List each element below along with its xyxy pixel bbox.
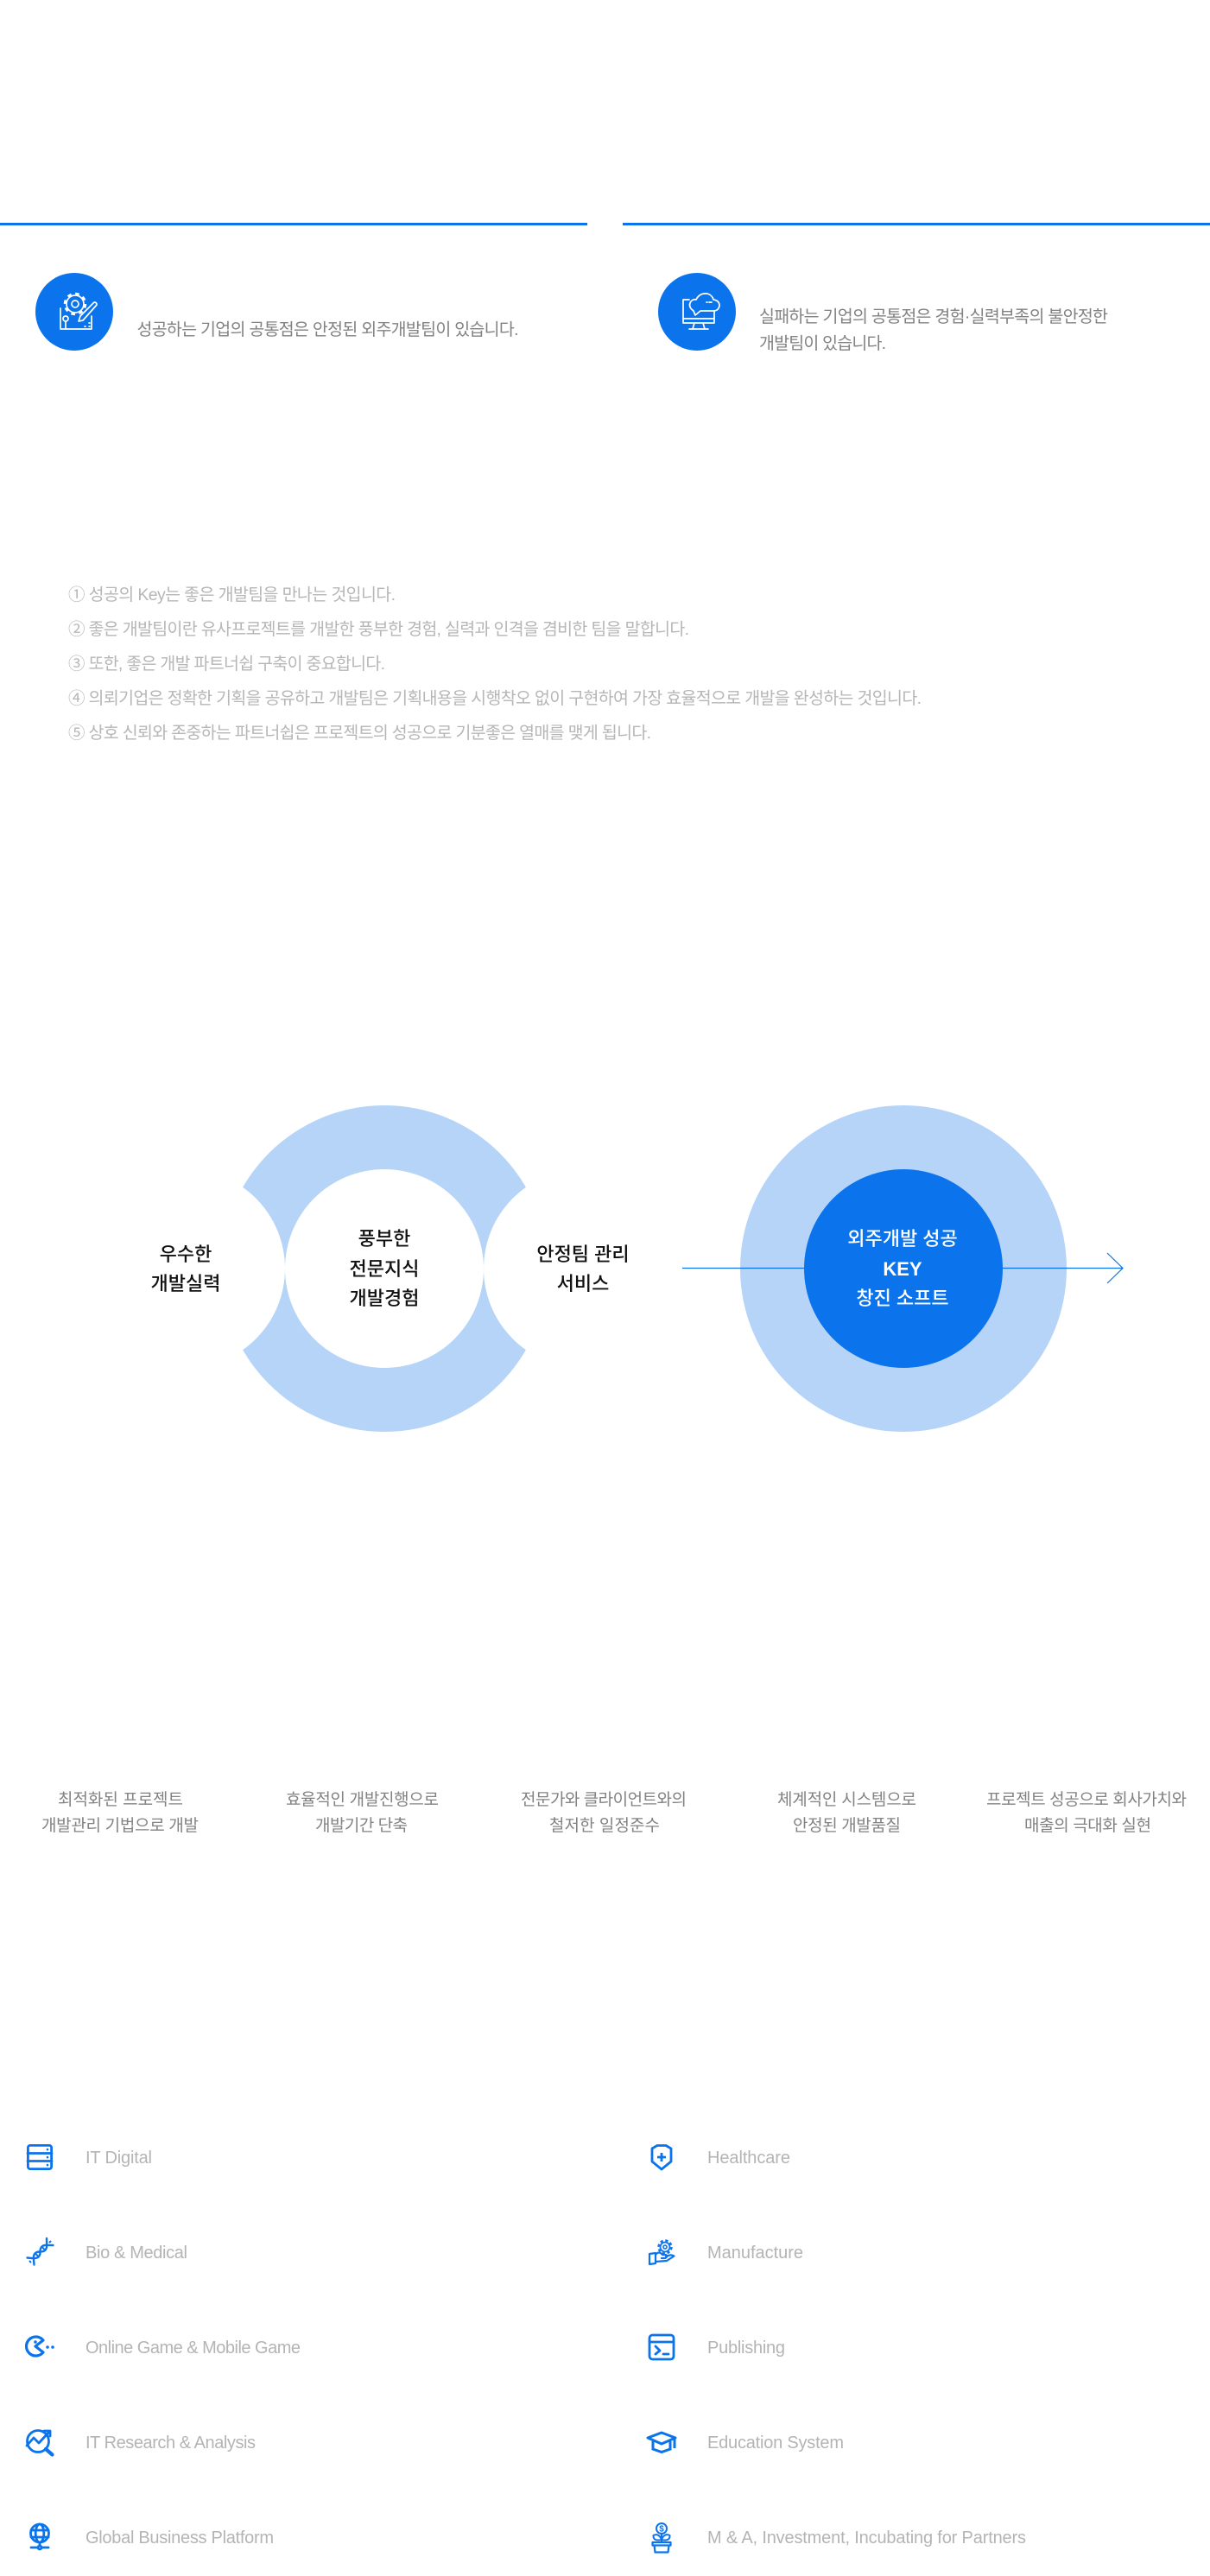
text: benefit 2 [286, 1790, 439, 1835]
row: Global Business: Global Business Platform [86, 2529, 274, 2548]
icon: money plant [653, 2523, 670, 2553]
text: benefit 5: 프로젝트 성공으로 회사가치와 [986, 1790, 1187, 1809]
label: success key [847, 1228, 958, 1309]
diagram: success key circle with arrow [682, 1105, 1123, 1432]
label: center circle: 풍부한 [358, 1228, 410, 1250]
row: Publishing [649, 2335, 785, 2359]
label: center circle [350, 1228, 419, 1309]
icon: hand with gear [649, 2240, 674, 2264]
icon: server [28, 2145, 52, 2169]
row: Online Game: Online Game & Mobile Game [86, 2339, 301, 2358]
icon: gear and pencil [35, 273, 113, 351]
row: Manufacture [649, 2240, 803, 2264]
text: benefit 1: 최적화된 프로젝트 [58, 1790, 183, 1809]
row: Bio & Medical [28, 2238, 187, 2264]
label: right circle: 안정팀 관리 [536, 1244, 630, 1265]
text: benefit 4: 안정된 개발품질 [793, 1816, 901, 1835]
text block: key points list: ① 성공의 Key는 좋은 개발팀을 만나는 것입니다. [68, 585, 396, 604]
diagram: three circle overlap [86, 1105, 682, 1432]
row: Education: Education System [707, 2434, 844, 2453]
row: IT Digital: IT Digital [86, 2149, 152, 2168]
row: IT Research [27, 2430, 256, 2454]
text: failure description [759, 307, 1108, 353]
label: right circle [536, 1244, 630, 1294]
text: benefit 4: 체계적인 시스템으로 [777, 1790, 916, 1809]
label: left circle: 우수한 [160, 1244, 212, 1265]
text: failure description: 실패하는 기업의 공통점은 경험·실력부족의 불안정한 [759, 307, 1108, 326]
icon: magnifier chart [27, 2430, 52, 2454]
icon: globe [31, 2524, 48, 2549]
text: benefit 2: 효율적인 개발진행으로 [286, 1790, 439, 1809]
row: Global Business [31, 2524, 274, 2549]
row: Education [648, 2433, 844, 2453]
text: benefit 3 [521, 1790, 687, 1835]
label: center circle: 개발경험 [350, 1288, 419, 1309]
icon: terminal window [649, 2335, 674, 2359]
row: Publishing: Publishing [707, 2339, 785, 2358]
label: success key: KEY [883, 1258, 922, 1280]
text block: key points list [68, 585, 922, 743]
row: M & A: M & A, Investment, Incubating for Partners [707, 2529, 1026, 2548]
icon: shield [652, 2145, 671, 2169]
text block: key points list: ② 좋은 개발팀이란 유사프로젝트를 개발한 풍부한 경험, 실력과 인격을 겸비한 팀을 말합니다. [68, 620, 689, 639]
panel: success companies [0, 223, 587, 351]
text: benefit 2: 개발기간 단축 [315, 1816, 408, 1835]
row: Bio & Medical: Bio & Medical [86, 2244, 187, 2263]
label: left circle [151, 1244, 220, 1294]
text: benefit 3: 전문가와 클라이언트와의 [521, 1790, 687, 1809]
text: benefit 3: 철저한 일정준수 [549, 1816, 660, 1835]
label: success key: 창진 소프트 [856, 1288, 949, 1309]
label: right circle: 서비스 [557, 1273, 609, 1294]
text: benefit 5 [986, 1790, 1187, 1835]
panel: failing companies [623, 223, 1210, 353]
text block: key points list: ④ 의뢰기업은 정확한 기획을 공유하고 개발팀은 기획내용을 시행착오 없이 구현하여 가장 효율적으로 개발을 완성하는 것입니다. [68, 689, 922, 708]
label: left circle: 개발실력 [151, 1273, 220, 1294]
label: center circle: 전문지식 [350, 1258, 419, 1280]
icon: graduation cap [648, 2433, 675, 2453]
text: benefit 4 [777, 1790, 916, 1835]
row: Healthcare [652, 2145, 790, 2169]
icon: monitor and cloud [658, 273, 736, 351]
text: benefit 1 [41, 1790, 199, 1835]
arrow [682, 1253, 1123, 1283]
text: failure description: 개발팀이 있습니다. [759, 334, 886, 353]
text: benefit 1: 개발관리 기법으로 개발 [41, 1816, 199, 1835]
row: IT Digital [28, 2145, 152, 2169]
row: Manufacture: Manufacture [707, 2244, 803, 2263]
text: success description: 성공하는 기업의 공통점은 안정된 외주개발팀이 있습니다. [136, 320, 518, 339]
row: M & A [653, 2523, 1026, 2553]
text: benefit 5: 매출의 극대화 실현 [1024, 1816, 1151, 1835]
icon: money plant: $ [659, 2525, 664, 2534]
icon: pacman [27, 2337, 54, 2356]
row: IT Research: IT Research & Analysis [86, 2434, 256, 2453]
row: Healthcare: Healthcare [707, 2149, 790, 2168]
label: success key: 외주개발 성공 [847, 1228, 958, 1250]
text block: key points list: ③ 또한, 좋은 개발 파트너쉽 구축이 중요합니다. [68, 655, 385, 674]
icon: dna [28, 2238, 54, 2264]
text block: key points list: ⑤ 상호 신뢰와 존중하는 파트너쉽은 프로젝트의 성공으로 기분좋은 열매를 맺게 됩니다. [68, 724, 651, 743]
